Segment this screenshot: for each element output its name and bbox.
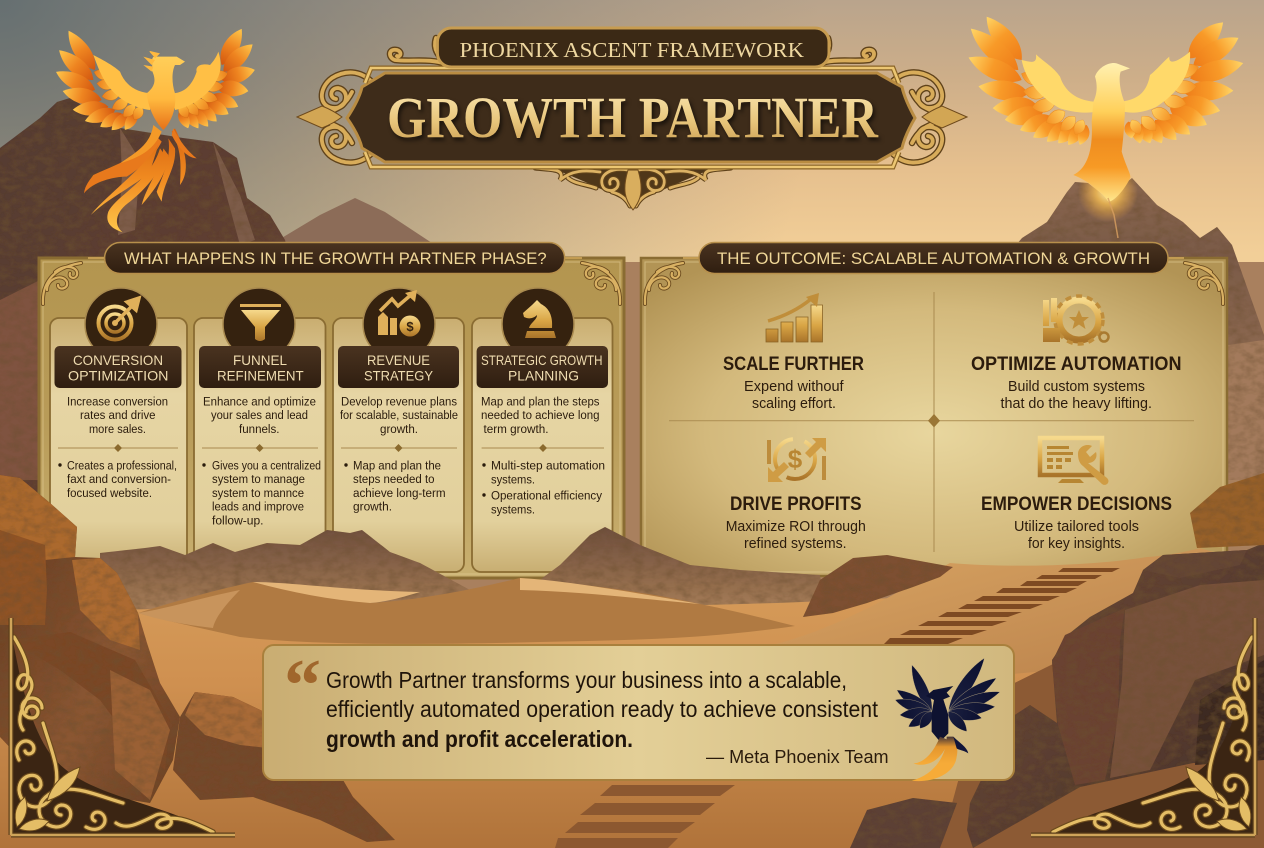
quote text: efficiently automated operation ready to achieve consistent: [326, 696, 879, 722]
rock: right cliff: [967, 543, 1264, 848]
heading pill: right panel: [683, 242, 1184, 274]
distant desert mountains: [100, 527, 830, 640]
sand ridge with stairs: [760, 548, 1240, 680]
title box: OPTIMIZATION: [68, 368, 168, 384]
title box: STRATEGIC GROWTH: [481, 352, 602, 368]
subtitle pill: PHOENIX ASCENT FRAMEWORK: [460, 38, 804, 62]
stairs: right: [884, 568, 1120, 644]
rock: right orange boulder: [1190, 473, 1264, 548]
description: Increase conversion: [67, 394, 168, 408]
left mountain: [0, 98, 300, 520]
quadrant: drive profits: DRIVE PROFITS: [730, 494, 862, 515]
title box: CONVERSION: [73, 352, 163, 368]
rock: left pillar: [0, 475, 180, 803]
volcano lava streak: [1108, 198, 1118, 238]
bullets: [482, 458, 605, 516]
title box: [54, 346, 182, 388]
description: [340, 394, 458, 436]
panel: the outcome: [641, 242, 1227, 576]
bullets: faxt and conversion-: [67, 472, 171, 486]
quadrant: empower decisions: [981, 438, 1172, 552]
heading pill: left panel: WHAT HAPPENS IN THE GROWTH PARTNER PHASE?: [124, 249, 547, 268]
ornament: bottom-right corner: [1031, 618, 1255, 835]
subtitle pill: [437, 28, 829, 67]
bullets: Creates a professional,: [67, 458, 177, 472]
quadrant: drive profits: [726, 438, 866, 552]
quote text: [326, 667, 879, 752]
quadrant: scale further: [723, 293, 864, 412]
panel: what happens in the growth partner phase: [39, 242, 624, 578]
description: [481, 394, 600, 436]
foreground desert landscape: [0, 473, 1264, 848]
title box: REVENUE: [367, 352, 430, 368]
title box: [477, 346, 608, 388]
card: conversion optimization: [50, 288, 187, 572]
bullets: system to mannce: [212, 486, 304, 500]
rock: left low boulder: [173, 692, 395, 842]
card: strategic growth planning: [472, 288, 612, 572]
bullets: Map and plan the: [353, 458, 441, 472]
dune shadow faces: [138, 578, 795, 644]
quadrant: drive profits: refined systems.: [744, 536, 847, 552]
quadrant: scale further: scaling effort.: [752, 396, 836, 412]
bullets: achieve long-term: [353, 486, 446, 500]
description: Develop revenue plans: [341, 394, 457, 408]
bullets: growth.: [353, 500, 392, 514]
right phoenix: [964, 11, 1246, 238]
icon: rising bars: [766, 293, 822, 342]
ornament: left panel corners: [43, 263, 620, 304]
icon: chess knight: [502, 288, 574, 360]
description: [203, 394, 316, 436]
quadrant: scale further: Expend withouf: [744, 379, 845, 395]
bullets: leads and improve: [212, 500, 304, 514]
sand ground: [0, 575, 1264, 848]
quadrant: optimize automation: OPTIMIZE AUTOMATION: [971, 354, 1182, 375]
bullets: Operational efficiency: [491, 488, 603, 502]
ornament: right panel corners: [645, 263, 1223, 304]
ornament: bottom-left corner: [11, 618, 235, 835]
quadrant: drive profits: Maximize ROI through: [726, 519, 866, 535]
wings and body: [964, 11, 1246, 202]
bullets: system to manage: [212, 472, 305, 486]
bullets: focused website.: [67, 486, 152, 500]
heading pill: right panel: THE OUTCOME: SCALABLE AUTOMATION & GROWTH: [717, 249, 1150, 268]
icon: navy phoenix: [893, 654, 1002, 781]
description: more sales.: [89, 422, 146, 436]
quadrant: empower decisions: for key insights.: [1028, 536, 1125, 552]
bullets: Gives you a centralized: [212, 458, 321, 472]
quadrant: scale further: SCALE FURTHER: [723, 354, 864, 375]
left phoenix: [53, 25, 258, 232]
description: Map and plan the steps: [481, 394, 600, 408]
icon: rising chart and dollar coin: [363, 288, 435, 360]
scroll ornaments: [297, 38, 967, 163]
quote text: Growth Partner transforms your business into a scalable,: [326, 667, 847, 693]
dune crests: [253, 578, 700, 604]
icon: dollar with circular arrows: [767, 438, 826, 482]
quadrant: empower decisions: EMPOWER DECISIONS: [981, 494, 1172, 515]
quadrant: optimize automation: Build custom systems: [1008, 379, 1145, 395]
description: for scalable, sustainable: [340, 408, 458, 422]
title box: FUNNEL: [233, 352, 287, 368]
bottom right shaded sand: [940, 560, 1264, 848]
bullets: systems.: [491, 502, 535, 516]
card: funnel refinement: [194, 288, 326, 572]
bottom ornament: [535, 168, 731, 210]
quote text: growth and profit acceleration.: [326, 726, 633, 752]
heading pill: left panel: [88, 242, 582, 274]
title: GROWTH PARTNER: [387, 85, 879, 150]
title box: STRATEGY: [364, 368, 434, 384]
bullets: [344, 458, 446, 514]
description: [67, 394, 168, 436]
bullets: [202, 458, 321, 528]
main plate: [347, 73, 915, 162]
icon: target with arrow: [85, 288, 157, 360]
icon: rising chart and dollar coin: $: [406, 319, 414, 334]
description: rates and drive: [80, 408, 156, 422]
bullets: steps needed to: [353, 472, 435, 486]
bullets: follow-up.: [212, 514, 264, 528]
distant peak: [270, 198, 435, 245]
description: growth.: [380, 422, 418, 436]
title box: REFINEMENT: [217, 368, 304, 384]
quadrant: empower decisions: Utilize tailored tools: [1014, 519, 1139, 535]
icon: monitor and wrench: [1040, 438, 1108, 485]
description: funnels.: [239, 422, 280, 436]
quadrant: optimize automation: [971, 296, 1182, 412]
description: term growth.: [484, 422, 548, 436]
icon: funnel: [223, 288, 295, 360]
title plaque: [297, 28, 967, 210]
card: revenue strategy: [333, 288, 464, 572]
rock: bottom right: [850, 798, 957, 848]
icon: gear with star: [1043, 296, 1108, 344]
callout: quote box: [263, 645, 1014, 781]
bullets: systems.: [491, 472, 535, 486]
icon: dollar with circular arrows: $: [788, 444, 803, 474]
bullets: Multi-step automation: [491, 458, 605, 472]
title box: PLANNING: [508, 368, 579, 384]
rock mound behind stairs: [803, 555, 953, 617]
description: your sales and lead: [211, 408, 308, 422]
stairs: bottom: [555, 785, 735, 848]
title box: [338, 346, 459, 388]
attribution: — Meta Phoenix Team: [706, 746, 889, 767]
icon: quotation mark: “: [284, 645, 321, 727]
description: Enhance and optimize: [203, 394, 316, 408]
quadrant: optimize automation: that do the heavy lifting.: [1000, 396, 1152, 412]
description: needed to achieve long: [481, 408, 600, 422]
title box: [199, 346, 321, 388]
bullets: [58, 458, 177, 500]
right mountain with volcano: [1005, 178, 1264, 480]
